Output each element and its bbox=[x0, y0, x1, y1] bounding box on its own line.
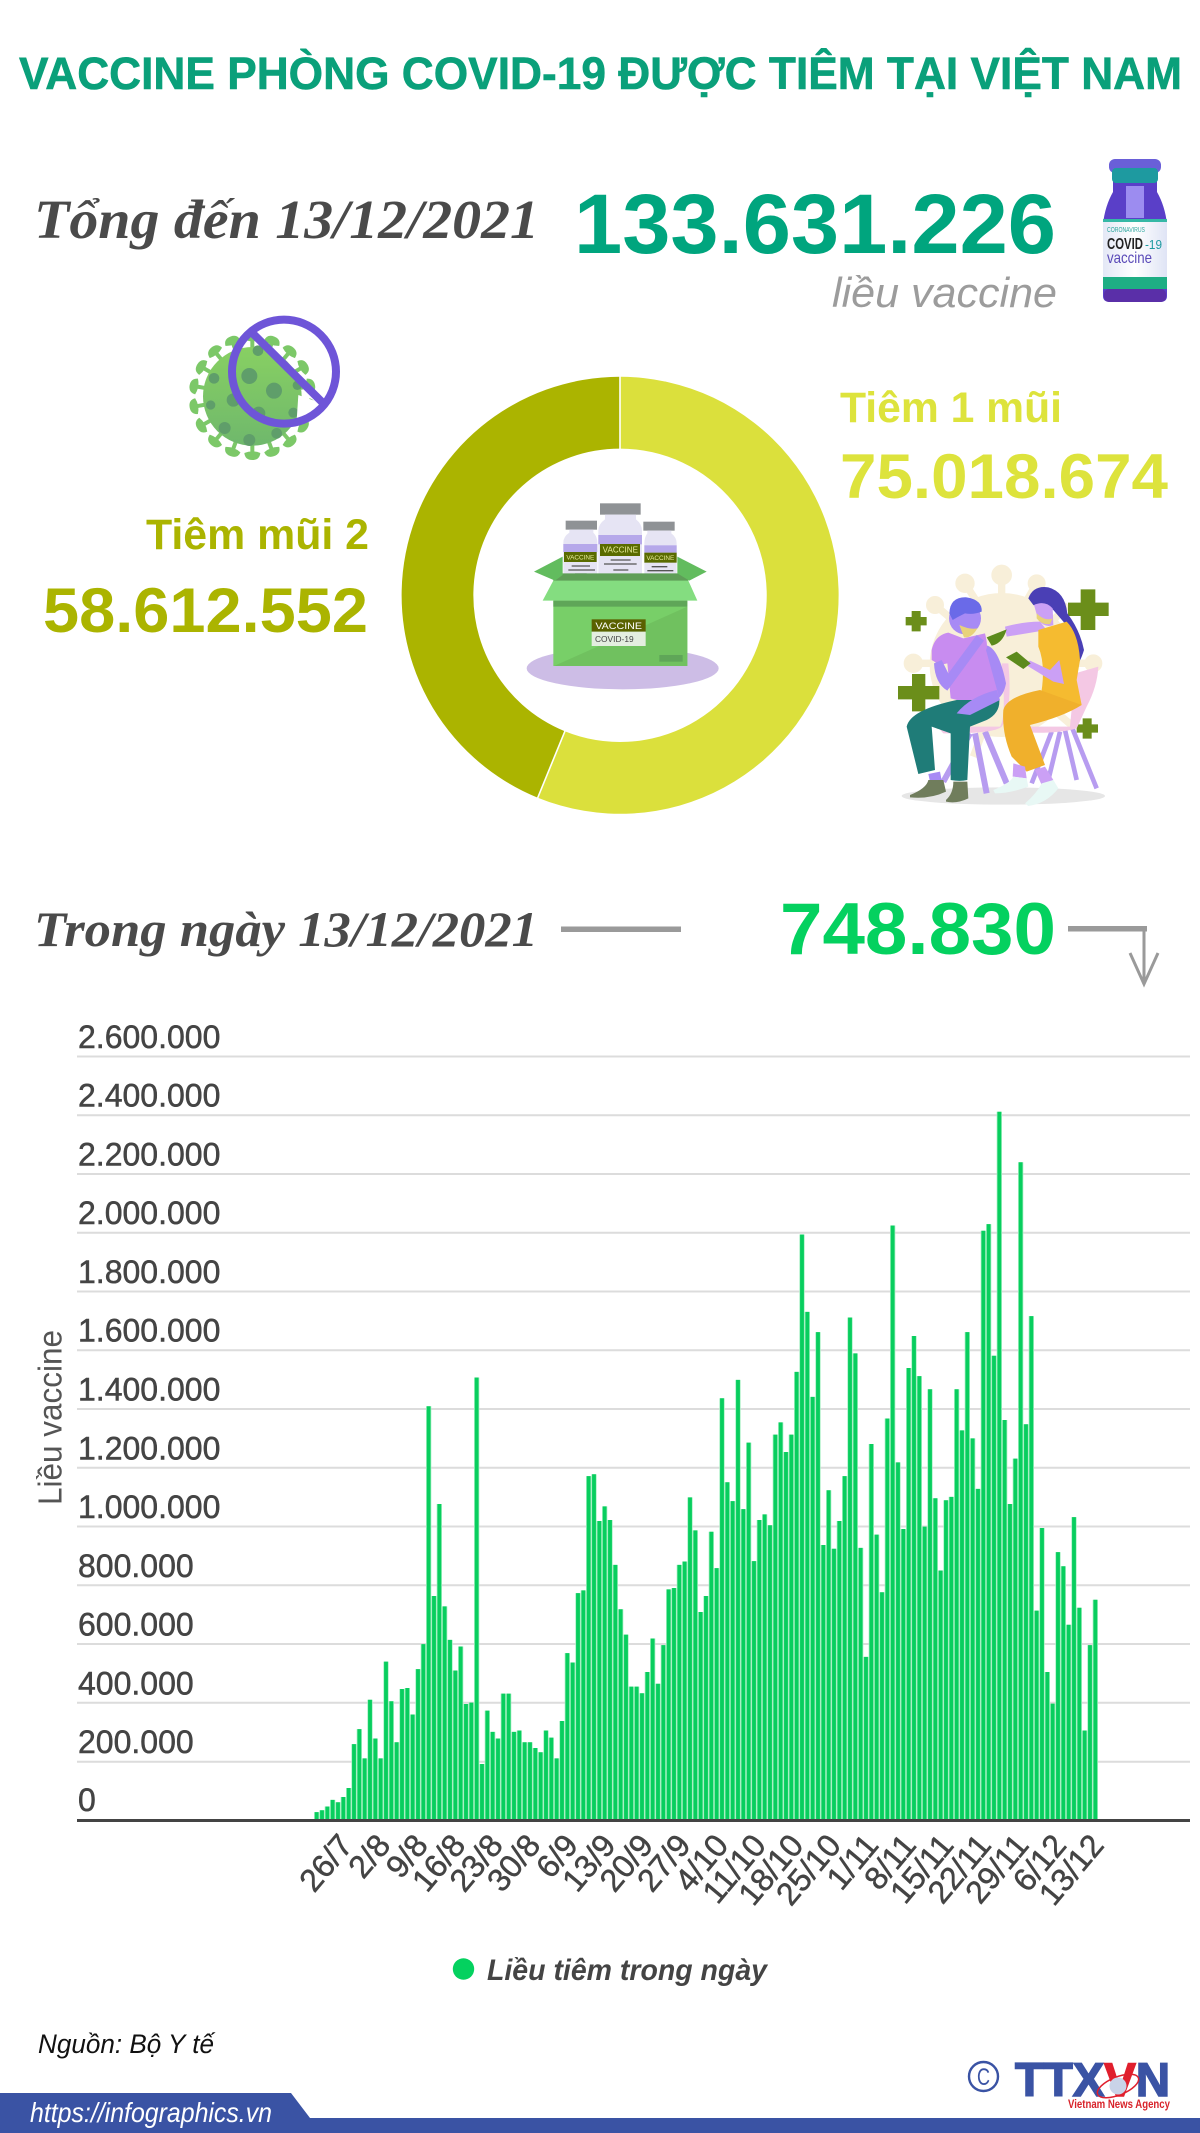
y axis labels: 1.600.000 bbox=[78, 1313, 220, 1349]
icon: vaccine box bbox=[527, 503, 719, 689]
x axis date labels: 6/9 bbox=[529, 1827, 585, 1885]
icon: vaccine vial: vaccine bbox=[1107, 250, 1152, 267]
y axis labels: 200.000 bbox=[78, 1724, 194, 1760]
footer band bbox=[0, 2093, 1200, 2133]
centre vial: VACCINE bbox=[603, 545, 638, 554]
y axis labels: 600.000 bbox=[78, 1606, 194, 1642]
source: Nguồn: Bộ Y tế bbox=[38, 2029, 216, 2059]
daily doses number: 748.830 bbox=[780, 889, 1056, 970]
right vial bbox=[643, 522, 677, 579]
x axis date labels: 30/8 bbox=[480, 1827, 547, 1898]
x axis date labels: 26/7 bbox=[292, 1827, 360, 1898]
box flaps and body: COVID-19 bbox=[595, 634, 634, 644]
y axis labels: 0 bbox=[78, 1782, 96, 1818]
number: second dose: 58.612.552 bbox=[43, 576, 368, 646]
heading: total to date: Tổng đến 13/12/2021 bbox=[34, 189, 539, 250]
x axis line bbox=[77, 1819, 1190, 1822]
x axis date labels: 11/10 bbox=[695, 1827, 773, 1910]
right vial: VACCINE bbox=[646, 555, 675, 562]
x axis date labels: 16/8 bbox=[405, 1827, 472, 1898]
x axis date labels: 8/11 bbox=[857, 1827, 923, 1896]
y axis labels bbox=[78, 1019, 220, 1818]
y axis labels: 1.400.000 bbox=[78, 1372, 220, 1408]
logo: TTXVN: C bbox=[977, 2064, 990, 2091]
bars bbox=[317, 1112, 1095, 1821]
x axis date labels: 22/11 bbox=[920, 1827, 998, 1910]
icon: vaccine vial: -19 bbox=[1145, 237, 1162, 252]
y axis labels: 2.400.000 bbox=[78, 1078, 220, 1114]
y axis labels: 2.000.000 bbox=[78, 1195, 220, 1231]
man bbox=[907, 597, 1006, 802]
left vial: VACCINE bbox=[566, 554, 595, 561]
x axis date labels: 18/10 bbox=[731, 1827, 810, 1912]
x axis date labels: 1/11 bbox=[819, 1827, 885, 1896]
y axis labels: 2.600.000 bbox=[78, 1019, 220, 1055]
unit label: liều vaccine bbox=[832, 269, 1057, 316]
x axis date labels: 9/8 bbox=[379, 1827, 435, 1885]
x axis date labels: 20/9 bbox=[592, 1827, 660, 1898]
icon: vaccine vial: COVID bbox=[1107, 236, 1143, 253]
x axis date labels: 4/10 bbox=[668, 1827, 735, 1898]
x axis date labels: 15/11 bbox=[883, 1827, 960, 1910]
arrow to chart bbox=[1068, 928, 1158, 984]
label: second dose: Tiêm mũi 2 bbox=[146, 511, 369, 559]
y axis labels: 800.000 bbox=[78, 1548, 194, 1584]
y axis labels: 1.000.000 bbox=[78, 1489, 220, 1525]
donut chart bbox=[402, 376, 839, 814]
heading: in the day: Trong ngày 13/12/2021 bbox=[34, 901, 538, 957]
icon: virus with ban sign bbox=[188, 320, 336, 460]
x axis date labels bbox=[292, 1827, 1111, 1912]
bar chart: daily doses bbox=[32, 1019, 1190, 1912]
logo: TTXVN: TTXVN bbox=[1015, 2053, 1170, 2106]
x axis date labels: 29/11 bbox=[958, 1827, 1036, 1910]
y axis labels: 400.000 bbox=[78, 1665, 194, 1701]
legend: Liều tiêm trong ngày bbox=[487, 1954, 768, 1987]
y axis labels: 1.800.000 bbox=[78, 1254, 220, 1290]
x axis date labels: 2/8 bbox=[341, 1827, 397, 1885]
box flaps and body: VACCINE bbox=[595, 621, 642, 631]
x axis date labels: 25/10 bbox=[769, 1827, 848, 1912]
icon: vaccine vial: CORONAVIRUS bbox=[1107, 227, 1145, 234]
x axis date labels: 13/9 bbox=[555, 1827, 623, 1898]
woman bbox=[987, 587, 1084, 806]
icon: vaccine vial bbox=[1103, 159, 1167, 302]
footer band: https://infographics.vn bbox=[30, 2097, 272, 2128]
y axis labels: 1.200.000 bbox=[78, 1430, 220, 1466]
title: VACCINE PHÒNG COVID-19 ĐƯỢC TIÊM TẠI VIỆT NAM bbox=[19, 48, 1182, 99]
x axis date labels: 27/9 bbox=[630, 1827, 698, 1898]
gridlines bbox=[77, 1056, 1190, 1762]
logo: TTXVN: Vietnam News Agency bbox=[1068, 2097, 1170, 2111]
total doses number: 133.631.226 bbox=[574, 177, 1056, 271]
label: first dose: Tiêm 1 mũi bbox=[840, 384, 1062, 432]
y axis title: Liều vaccine bbox=[32, 1330, 68, 1505]
x axis date labels: 6/12 bbox=[1006, 1827, 1073, 1898]
y axis labels: 2.200.000 bbox=[78, 1136, 220, 1172]
centre vial bbox=[598, 503, 642, 580]
left vial bbox=[563, 521, 597, 579]
illustration: nurse vaccinating patient bbox=[898, 568, 1109, 806]
chairs bbox=[937, 663, 1098, 793]
number: first dose: 75.018.674 bbox=[840, 442, 1168, 512]
x axis date labels: 13/12 bbox=[1032, 1827, 1111, 1912]
divider line beside daily heading bbox=[561, 926, 681, 932]
box flaps and body bbox=[534, 557, 707, 666]
x axis date labels: 23/8 bbox=[442, 1827, 510, 1898]
